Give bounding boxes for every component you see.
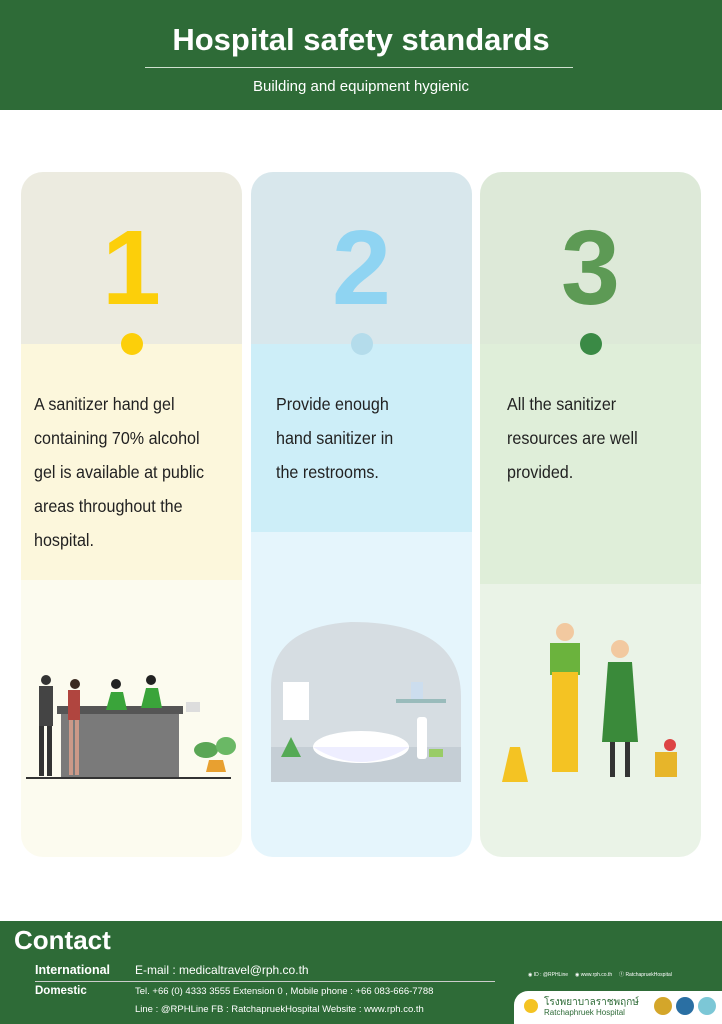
subtitle: Building and equipment hygienic xyxy=(253,78,469,95)
footer: contact: International xyxy=(35,963,110,977)
title: Hospital safety standards xyxy=(172,22,550,57)
text 3: resources are well xyxy=(507,428,638,448)
footer: contact: Line : @RPHLine FB : RatchapruekHospital Website : www.rph.co.th xyxy=(135,1004,424,1015)
text 1: A sanitizer hand gel xyxy=(34,394,175,414)
text 3 xyxy=(507,394,638,482)
footer: contact: Tel. +66 (0) 4333 3555 Extension 0 , Mobile phone : +66 083-666-7788 xyxy=(135,986,433,997)
text 3: provided. xyxy=(507,462,573,482)
header xyxy=(0,0,722,110)
logo: โรงพยาบาลราชพฤกษ์ xyxy=(544,997,639,1008)
panel: card 2 xyxy=(251,172,472,857)
logo xyxy=(514,991,722,1024)
illustration: cleaners xyxy=(502,623,677,782)
text 2: the restrooms. xyxy=(276,462,379,482)
text 1 xyxy=(34,394,204,550)
number 3: 3 xyxy=(561,209,620,327)
logo: Ratchaphruek Hospital xyxy=(544,1008,625,1017)
text 3: All the sanitizer xyxy=(507,394,616,414)
illustration: reception desk xyxy=(26,675,236,779)
text 2: hand sanitizer in xyxy=(276,428,393,448)
number 1: 1 xyxy=(102,209,161,327)
text 1: gel is available at public xyxy=(34,462,204,482)
illustration: restroom xyxy=(271,622,461,782)
panel: card 3 xyxy=(480,172,701,857)
footer: contact xyxy=(0,921,722,1024)
panel: card 1 xyxy=(21,172,242,857)
social links: ◉ ID : @RPHLine ◉ www.rph.co.th ⓕ RatchapruekHospital xyxy=(528,972,672,978)
footer: contact: E-mail : medicaltravel@rph.co.th xyxy=(135,963,309,977)
text 1: areas throughout the xyxy=(34,496,183,516)
text 1: containing 70% alcohol xyxy=(34,428,200,448)
number 2: 2 xyxy=(332,209,391,327)
footer: contact: Domestic xyxy=(35,985,87,997)
contact details xyxy=(35,963,495,1015)
text 2: Provide enough xyxy=(276,394,389,414)
contact heading: Contact xyxy=(14,925,111,955)
text 2 xyxy=(276,394,393,482)
text 1: hospital. xyxy=(34,530,94,550)
